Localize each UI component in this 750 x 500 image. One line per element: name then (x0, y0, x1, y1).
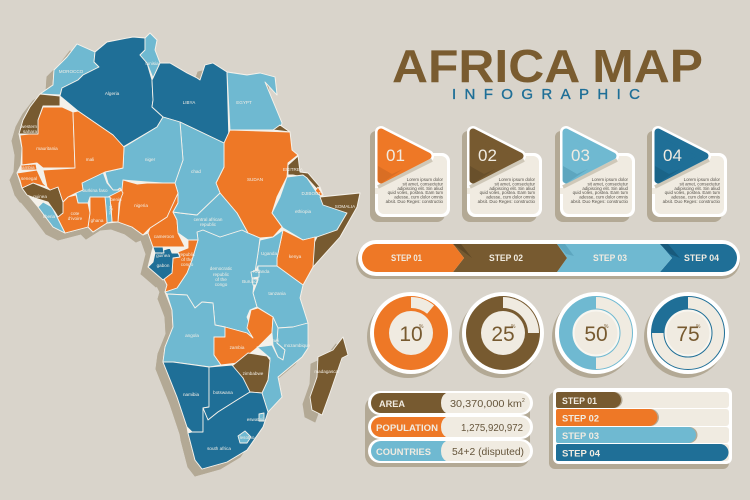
country: Benin (108, 188, 123, 222)
map labels: Uganda (261, 251, 277, 256)
card 03: 03 (571, 146, 590, 165)
country: Eritrea (288, 156, 320, 189)
card 03: quid voles, postea. Eam tum (573, 190, 628, 195)
donut: 75 (644, 292, 729, 378)
fact: countries: COUNTRIES (376, 447, 431, 457)
country: Guinea (22, 183, 63, 217)
map labels: DJIBOUTI (302, 191, 322, 196)
country: Egypt (227, 72, 282, 130)
card 01: 01 (386, 146, 405, 165)
country: Mali (43, 111, 124, 202)
map labels: EGYPT (236, 100, 252, 105)
card 03 (555, 132, 635, 222)
step labels: STEP 04 (684, 253, 719, 263)
row: step 04: STEP 04 (562, 448, 600, 458)
map labels: cameroon (154, 234, 175, 239)
card 03: adesse, cum dolor omnis (579, 195, 629, 200)
country: Nigeria (118, 180, 178, 235)
subtitle: INFOGRAPHIC (452, 86, 640, 103)
country: Angola (163, 294, 225, 367)
facts panel (365, 391, 533, 467)
map labels: malawi (265, 338, 279, 343)
country: Namibia (163, 362, 209, 432)
country: Equatorial Guinea (153, 247, 164, 253)
map labels: congo (215, 282, 228, 287)
country: Madagascar (310, 337, 348, 415)
map labels: republic (213, 272, 230, 277)
map labels: niger (145, 157, 156, 162)
card 04: adipiscing elit. Sin aliud (674, 186, 721, 191)
country: Burkina Faso (76, 172, 122, 203)
row: step 02 (556, 409, 729, 426)
country: Botswana (203, 365, 250, 420)
country: Rwanda (251, 270, 259, 278)
map shadow (10, 40, 353, 476)
card 03: absit. Duo Reges: constructio (571, 199, 629, 204)
row: step 01 (556, 392, 729, 408)
country: Chad (173, 122, 224, 215)
country: Uganda (255, 230, 283, 272)
map labels: mauritania (36, 146, 58, 151)
card 04: sit amet, consectetur (679, 181, 721, 186)
map labels: MOROCCO (59, 69, 84, 74)
fact: population: 1,275,920,972 (461, 423, 523, 434)
row: step 03 (556, 427, 729, 443)
fact: population (368, 415, 533, 439)
country: Libya (152, 63, 229, 143)
map labels: zimbabwe (243, 371, 264, 376)
map labels: ethiopia (295, 209, 311, 214)
country: Kenya (277, 230, 315, 285)
donut: 50: % (604, 324, 609, 330)
card 02: sit amet, consectetur (494, 181, 536, 186)
country: Democratic Republic of the Congo (165, 230, 260, 338)
country: Zimbabwe (232, 353, 270, 393)
card 01 (370, 132, 450, 222)
fact: countries (368, 439, 533, 463)
map labels (19, 61, 356, 451)
card 03: sit amet, consectetur (587, 181, 629, 186)
map labels: gambia (19, 165, 35, 170)
fact: population: POPULATION (376, 423, 438, 433)
donut: 25 (459, 292, 544, 378)
fact: countries: 54+2 (disputed) (452, 447, 524, 458)
card 04: 04 (663, 146, 682, 165)
card 03: adipiscing elit. Sin aliud (582, 186, 629, 191)
map labels: tunisia (145, 61, 159, 66)
step labels: STEP 02 (489, 253, 523, 263)
map labels: ERITREA (283, 167, 304, 172)
map labels: Burundi (242, 279, 258, 284)
card 02: quid voles, postea. Eam tum (480, 190, 535, 195)
map labels: gabon (157, 263, 170, 268)
donut: 25: 25 (491, 323, 515, 346)
country: Mauritania (20, 107, 75, 168)
map labels: liberia (43, 214, 56, 219)
country: Sudan (216, 130, 298, 238)
map labels: senegal (21, 176, 37, 181)
map labels: nigeria (134, 203, 148, 208)
map labels: guinea (156, 253, 170, 258)
row: step 01: STEP 01 (562, 396, 597, 406)
map labels: benin (110, 197, 122, 202)
map labels: republic (200, 222, 217, 227)
map labels: SUDAN (247, 177, 263, 182)
map labels: togo (108, 205, 113, 214)
country: Eswatini (259, 413, 264, 421)
continent base (17, 33, 360, 469)
card 04: quid voles, postea. Eam tum (665, 190, 720, 195)
country: Ethiopia (272, 175, 347, 240)
fact: area: 30,370,000 km (450, 399, 522, 410)
card 04: absit. Duo Reges: constructio (663, 199, 721, 204)
map labels: democratic (210, 266, 233, 271)
card 04: adesse, cum dolor omnis (671, 195, 721, 200)
country: Somalia (312, 193, 360, 267)
fact: area (368, 391, 533, 415)
map labels: ghana (91, 218, 104, 223)
country: Republic of the Congo (163, 240, 198, 292)
donut: 75: 75 (676, 323, 700, 346)
title: AFRICA MAP (392, 40, 703, 92)
card 02: adipiscing elit. Sin aliud (489, 186, 536, 191)
country: Ghana (88, 197, 107, 232)
map labels: chad (191, 169, 201, 174)
country: Liberia (38, 202, 65, 233)
map labels: madagascar (314, 369, 340, 374)
country: Zambia (214, 308, 273, 365)
map labels: d'ivoire (68, 216, 83, 221)
map labels: tanzania (268, 291, 286, 296)
country: Niger (105, 117, 183, 190)
row: step 03: STEP 03 (562, 431, 599, 441)
map labels: western (21, 124, 37, 129)
map labels: botswana (213, 390, 233, 395)
map labels: angola (185, 333, 199, 338)
map labels: Rwanda (253, 269, 270, 274)
map labels: eswatini (247, 417, 263, 422)
map labels: kenya (289, 254, 302, 259)
map labels: guinea (33, 194, 47, 199)
country: Malawi (272, 317, 285, 360)
country: Morocco (40, 44, 99, 95)
map labels: of the (215, 277, 227, 282)
country: Gabon (148, 248, 180, 280)
step labels: STEP 01 (391, 253, 422, 263)
card 01: quid voles, postea. Eam tum (388, 190, 443, 195)
card 01: adesse, cum dolor omnis (394, 195, 444, 200)
country: Cote d'Ivoire (57, 195, 90, 233)
map labels: congo (181, 262, 194, 267)
country: Djibouti (315, 187, 323, 197)
card 01: sit amet, consectetur (402, 181, 444, 186)
map labels: mali (86, 157, 94, 162)
step labels (391, 253, 719, 263)
donut: 10 (367, 292, 452, 378)
progress panel (549, 388, 732, 469)
country: Togo (105, 197, 112, 223)
step bar (356, 240, 740, 279)
country: Gambia (21, 164, 37, 170)
donut: 50: 50 (584, 323, 608, 346)
card 02: 02 (478, 146, 497, 165)
country: Central African Republic (173, 193, 248, 240)
fact: area: 2 (522, 398, 525, 404)
map labels: SOMALIA (335, 204, 356, 209)
fact: area: AREA (379, 399, 405, 409)
card 02 (462, 132, 542, 222)
territory: Halaib (273, 125, 290, 132)
donut: 10: % (419, 324, 424, 330)
donut: 50 (552, 292, 637, 378)
country: Senegal (17, 170, 47, 188)
map labels: republic (179, 252, 196, 257)
card 03: Lorem ipsum dolor (592, 177, 629, 182)
donut: 75: % (696, 324, 701, 330)
card 01: Lorem ipsum dolor (407, 177, 444, 182)
map labels: cote (71, 211, 80, 216)
country: Cameroon (148, 193, 185, 247)
row: step 02: STEP 02 (562, 414, 599, 424)
map labels: south africa (207, 446, 231, 451)
country: Lesotho (238, 431, 251, 443)
donut: 25: % (511, 324, 516, 330)
country: Burundi (252, 279, 258, 285)
country: Algeria (60, 37, 163, 147)
country: Tunisia (140, 33, 160, 78)
map labels: namibia (183, 392, 199, 397)
map labels: sahara (23, 129, 37, 134)
map of Africa (17, 33, 360, 469)
row: step 04 (556, 444, 729, 461)
country: South Africa (188, 392, 268, 469)
map labels: burkina faso (82, 188, 108, 193)
map labels: of the (181, 257, 193, 262)
donut: 10: 10 (399, 323, 423, 346)
card 02: absit. Duo Reges: constructio (478, 199, 536, 204)
map labels: central african (194, 217, 223, 222)
country: Tanzania (253, 266, 308, 328)
territory: Western Sahara (19, 94, 60, 134)
card 04: Lorem ipsum dolor (684, 177, 721, 182)
map labels: mozambique (284, 343, 311, 348)
card 02: Lorem ipsum dolor (499, 177, 536, 182)
country: Mozambique (257, 323, 308, 412)
map labels: lesotho (240, 435, 255, 440)
card 04 (647, 132, 727, 222)
map labels: zambia (230, 345, 245, 350)
card 01: absit. Duo Reges: constructio (386, 199, 444, 204)
map labels: LIBYA (183, 100, 196, 105)
step labels: STEP 03 (593, 253, 627, 263)
card 02: adesse, cum dolor omnis (486, 195, 536, 200)
map labels: Algeria (105, 91, 120, 96)
card 01: adipiscing elit. Sin aliud (397, 186, 444, 191)
